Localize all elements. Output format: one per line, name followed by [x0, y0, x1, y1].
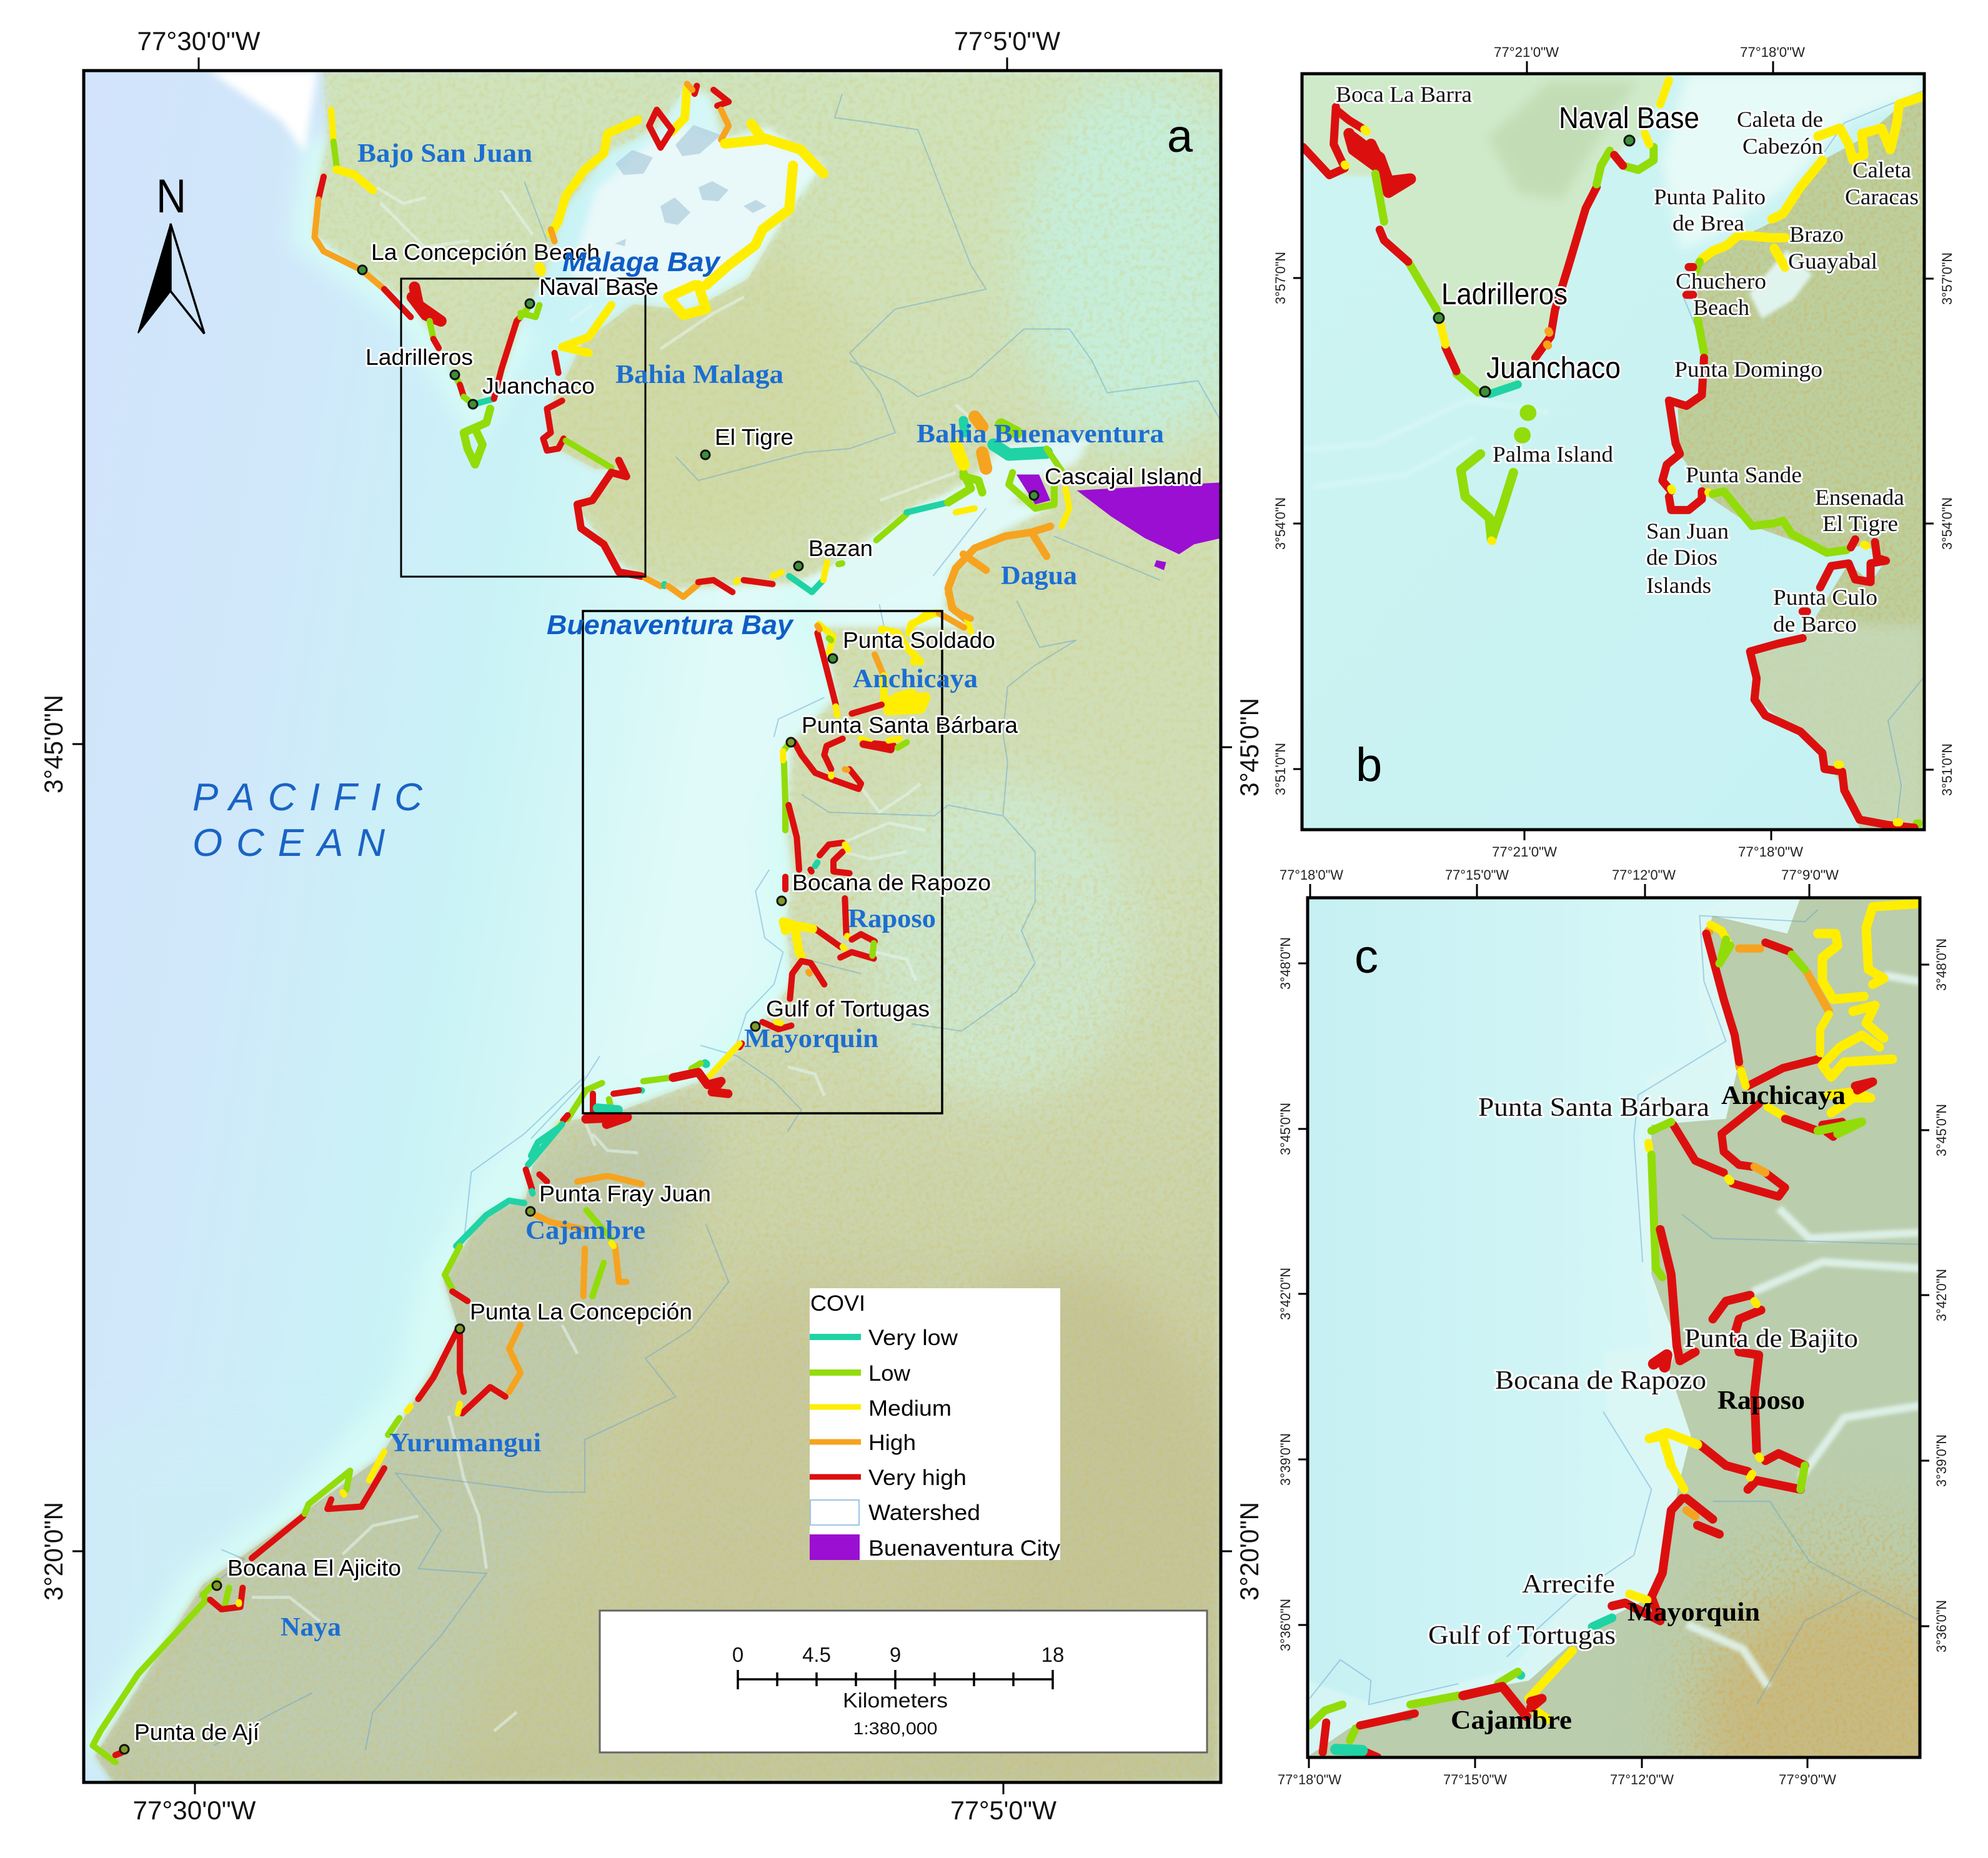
coastal vulnerability lines centre: [531, 594, 971, 1156]
inset b markers: [1434, 136, 1634, 397]
axis labels a: 3°45'0"N: [39, 695, 68, 793]
inset b serif labels: Brazo: [1789, 222, 1844, 247]
inset c watershed labels: Cajambre: [1451, 1706, 1572, 1735]
watershed labels blue: Raposo: [848, 905, 936, 933]
inset b serif labels: Chuchero: [1676, 269, 1766, 294]
scale bar: 4.5: [802, 1643, 831, 1666]
inset c watershed labels: Anchicaya: [1721, 1081, 1846, 1110]
inset c serif labels: Gulf of Tortugas: [1428, 1621, 1616, 1650]
axis labels b: 3°57'0"N: [1939, 252, 1955, 305]
place labels black: Punta Santa Bárbara: [802, 712, 1018, 738]
axis labels b: 3°54'0"N: [1273, 497, 1288, 550]
panel letter a: a: [1167, 110, 1193, 162]
inset b serif labels: Ensenada: [1815, 485, 1904, 510]
inset box b outline: [401, 279, 645, 577]
scale bar: 9: [890, 1643, 901, 1666]
panel letter b: b: [1356, 738, 1382, 792]
inset c watershed labels: [1451, 1081, 1846, 1735]
axis labels c: 77°18'0"W: [1278, 1772, 1341, 1787]
axis labels a: [39, 26, 1264, 1825]
place labels black: Cascajal Island: [1045, 464, 1202, 489]
inset c serif labels: Punta Santa Bárbara: [1478, 1093, 1709, 1122]
axis labels c: 77°18'0"W: [1280, 867, 1343, 883]
axis labels c: 77°9'0"W: [1781, 867, 1839, 883]
inset b sans labels: Naval Base: [1559, 102, 1699, 135]
place labels black: Punta La Concepción: [470, 1299, 692, 1324]
Cascajal Island purple: [1016, 474, 1050, 504]
inset b serif labels: Punta Sande: [1686, 462, 1802, 487]
panel a: main map: [39, 26, 1268, 1825]
axis labels b: 3°57'0"N: [1273, 252, 1288, 304]
inset b serif labels: Beach: [1693, 295, 1749, 320]
axis labels c: 3°45'0"N: [1934, 1104, 1949, 1156]
watershed labels blue: [281, 139, 1164, 1642]
axis labels c: 77°15'0"W: [1443, 1772, 1507, 1787]
axis labels b: [1273, 44, 1955, 860]
Pacific Ocean label: PACIFIC: [192, 776, 423, 819]
watershed labels blue: Yurumangui: [389, 1429, 541, 1458]
axis labels b: 77°21'0"W: [1492, 844, 1557, 860]
scale bar: [600, 1611, 1207, 1752]
inset c watershed labels: Mayorquin: [1628, 1598, 1760, 1627]
inset c serif labels: Punta de Bajito: [1684, 1324, 1858, 1353]
axis labels c: 77°15'0"W: [1445, 867, 1509, 883]
frame a: [84, 71, 1221, 1782]
axis labels b: 77°21'0"W: [1494, 44, 1559, 60]
inset b serif labels: Punta Culo: [1773, 585, 1877, 610]
scale bar: 18: [1041, 1643, 1064, 1666]
inset c watershed labels: Raposo: [1717, 1386, 1805, 1415]
legend: Very low: [868, 1326, 958, 1350]
axis labels c: 3°42'0"N: [1278, 1268, 1293, 1320]
watershed labels blue: Bahia Malaga: [615, 360, 783, 389]
axis labels c: 77°9'0"W: [1779, 1772, 1836, 1787]
axis labels b: 77°18'0"W: [1738, 844, 1803, 860]
place labels black: Punta Soldado: [843, 627, 995, 653]
axis labels c: 77°12'0"W: [1612, 867, 1676, 883]
axis labels c: 3°36'0"N: [1934, 1600, 1949, 1652]
axis labels b: 3°54'0"N: [1939, 497, 1955, 550]
legend: High: [868, 1431, 916, 1455]
watershed labels blue: Cajambre: [525, 1216, 645, 1245]
scale bar: Kilometers: [843, 1689, 948, 1712]
inset c terrain: [1308, 898, 1988, 1858]
north arrow: N: [156, 170, 186, 223]
inset b serif labels: de Barco: [1773, 612, 1857, 637]
frame b: [1302, 74, 1924, 830]
bay label Buenaventura Bay: Buenaventura Bay: [547, 610, 795, 640]
axis labels c: 3°42'0"N: [1934, 1269, 1949, 1321]
axis labels a: 3°20'0"N: [39, 1502, 68, 1601]
axis labels a: 3°20'0"N: [1235, 1502, 1264, 1601]
watershed labels blue: Bahia Buenaventura: [917, 420, 1164, 449]
north arrow: [138, 170, 204, 334]
inset b sans labels: [1441, 102, 1699, 385]
inset c serif labels: Bocana de Rapozo: [1495, 1366, 1706, 1395]
frame c: [1308, 898, 1920, 1757]
panel letter c: c: [1354, 930, 1378, 983]
inset b serif labels: Boca La Barra: [1336, 82, 1472, 107]
legend: Medium: [868, 1396, 952, 1421]
location markers: [120, 266, 1038, 1754]
watershed labels blue: Dagua: [1001, 562, 1077, 590]
inset b serif labels: Punta Palito: [1654, 184, 1766, 209]
axis labels c: 3°39'0"N: [1278, 1433, 1293, 1486]
axis labels b: 3°51'0"N: [1939, 743, 1955, 796]
axis labels c: 3°48'0"N: [1278, 937, 1293, 990]
inset b serif labels: Caracas: [1845, 184, 1919, 209]
axis labels a: 77°30'0"W: [137, 26, 261, 56]
inset b serif labels: El Tigre: [1822, 511, 1898, 536]
panel c: inset south: [1278, 867, 1988, 1858]
legend: Watershed: [868, 1501, 980, 1525]
inset b serif labels: Cabezón: [1742, 134, 1823, 159]
inset b serif labels: San Juan: [1646, 519, 1729, 544]
place labels black: Naval Base: [539, 274, 659, 300]
inset b serif labels: [1336, 82, 1919, 637]
Pacific Ocean label: [192, 776, 423, 865]
bay label Malaga Bay: Malaga Bay: [562, 247, 722, 277]
inset c serif labels: Arrecife: [1522, 1570, 1615, 1599]
legend: Buenaventura City: [868, 1536, 1061, 1561]
legend: [810, 1288, 1061, 1561]
Buenaventura City: [1077, 482, 1221, 570]
place labels black: Bocana El Ajicito: [227, 1555, 401, 1581]
axis labels c: 3°39'0"N: [1934, 1434, 1949, 1487]
axis labels a: 77°30'0"W: [132, 1796, 256, 1825]
place labels black: Juanchaco: [482, 373, 595, 399]
inset box c outline: [583, 611, 942, 1113]
inset c coastal lines: [1310, 904, 1919, 1757]
panel b: inset north: [1273, 44, 1955, 860]
inset b serif labels: Guayabal: [1788, 249, 1877, 274]
inset b serif labels: Islands: [1646, 573, 1711, 598]
place labels black: Bazan: [808, 535, 873, 561]
inset b serif labels: Caleta: [1852, 157, 1911, 182]
place labels black: La Concepción Beach: [371, 239, 600, 265]
place labels black: Ladrilleros: [365, 344, 473, 370]
inset b serif labels: de Dios: [1646, 545, 1717, 570]
place labels black: [134, 239, 1202, 1745]
inset b serif labels: Palma Island: [1493, 442, 1613, 467]
axis labels c: 3°45'0"N: [1278, 1103, 1293, 1155]
axis labels b: 77°18'0"W: [1740, 44, 1805, 60]
inset c serif labels: [1428, 1093, 1858, 1650]
axis labels c: 3°36'0"N: [1278, 1599, 1293, 1651]
place labels black: Punta Fray Juan: [539, 1181, 711, 1206]
axis labels c: [1278, 867, 1949, 1787]
inset b serif labels: de Brea: [1672, 211, 1744, 236]
legend: Low: [868, 1361, 911, 1386]
place labels black: El Tigre: [715, 424, 793, 450]
Pacific Ocean label: OCEAN: [192, 822, 385, 865]
axis labels b: 3°51'0"N: [1273, 743, 1288, 795]
axis labels a: 77°5'0"W: [954, 26, 1060, 56]
watershed labels blue: Mayorquin: [744, 1025, 878, 1053]
place labels black: Punta de Ají: [134, 1719, 259, 1745]
inset b sans labels: Ladrilleros: [1441, 278, 1568, 311]
scale bar: 0: [732, 1643, 743, 1666]
inset b coastal lines: [1303, 80, 1923, 828]
legend: Very high: [868, 1466, 967, 1490]
place labels black: Bocana de Rapozo: [792, 870, 991, 895]
watershed labels blue: Naya: [281, 1613, 341, 1642]
inset b sans labels: Juanchaco: [1486, 352, 1621, 385]
inset b serif labels: Caleta de: [1737, 107, 1823, 132]
axis labels c: 3°48'0"N: [1934, 938, 1949, 991]
map a base terrain: [84, 71, 1268, 1793]
place labels black: Gulf of Tortugas: [766, 996, 930, 1021]
axis labels c: 77°12'0"W: [1610, 1772, 1674, 1787]
inset b terrain: [1302, 74, 1924, 831]
axis labels a: 3°45'0"N: [1235, 698, 1264, 797]
inset b serif labels: Punta Domingo: [1674, 357, 1822, 382]
axis labels a: 77°5'0"W: [950, 1796, 1056, 1825]
watershed labels blue: Bajo San Juan: [357, 139, 532, 168]
legend: COVI: [810, 1291, 865, 1316]
watershed labels blue: Anchicaya: [853, 665, 978, 693]
coastal vulnerability lines south: [92, 1124, 642, 1762]
scale bar: 1:380,000: [853, 1719, 937, 1738]
coastal vulnerability lines north: [314, 84, 1070, 632]
